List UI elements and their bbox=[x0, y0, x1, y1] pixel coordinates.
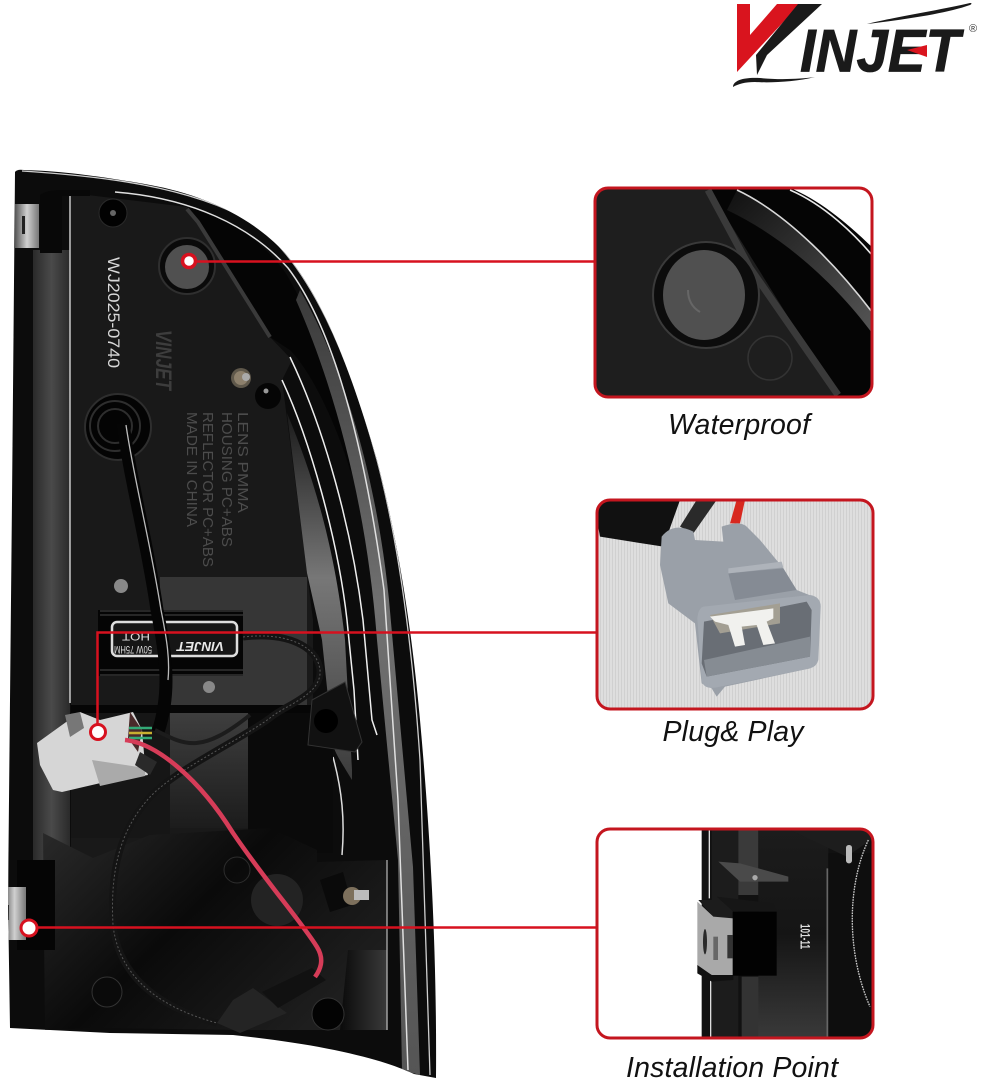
logo registered mark: ® bbox=[969, 23, 977, 35]
lower hinge metal clip bbox=[8, 887, 26, 940]
logo swoosh top bbox=[867, 3, 972, 24]
moulded logo: VINJET bbox=[151, 330, 176, 391]
large disc mark bbox=[251, 874, 303, 926]
small screw bbox=[203, 681, 215, 693]
top hinge metal clip bbox=[15, 204, 39, 248]
moulded material text: REFLECTOR PC+ABS bbox=[199, 412, 216, 567]
inner wedge bbox=[287, 413, 352, 780]
right lower box bbox=[340, 950, 387, 1030]
marker bbox=[182, 254, 196, 268]
ridge bbox=[187, 209, 270, 337]
white connector bbox=[37, 712, 157, 792]
screw bbox=[114, 579, 128, 593]
main black cable bbox=[123, 423, 166, 732]
left lower grommet bbox=[92, 977, 122, 1007]
braided loom bbox=[114, 634, 307, 986]
label brand: VINJET bbox=[176, 639, 224, 654]
red wire bbox=[125, 740, 321, 977]
left vertical strip bbox=[33, 250, 70, 870]
mounting tab bbox=[33, 860, 55, 950]
detail photo: mounting clip bbox=[597, 828, 875, 1040]
frame bbox=[597, 500, 873, 709]
detail photo: connector bbox=[593, 500, 873, 709]
panel: installation point bbox=[597, 828, 875, 1082]
logo: Vinjet bbox=[733, 3, 977, 87]
black bead bbox=[255, 383, 281, 409]
top grommet bbox=[99, 199, 127, 227]
lower grommets bbox=[312, 998, 344, 1030]
marker bbox=[90, 724, 106, 740]
panel: plug and play bbox=[593, 500, 873, 748]
callout line: waterproof bbox=[182, 254, 595, 268]
vertical white lines bbox=[8, 196, 71, 905]
logo mark: red V bbox=[737, 4, 800, 72]
small disc mark bbox=[224, 857, 250, 883]
lamp body bbox=[0, 160, 450, 1082]
label spec: 50W 75HM bbox=[114, 643, 152, 655]
frame bbox=[597, 829, 873, 1038]
lower housing block bbox=[43, 828, 388, 1030]
logo wordmark: INJET bbox=[800, 18, 964, 84]
moulded material text bbox=[187, 413, 248, 566]
callout line: plug and play bbox=[90, 632, 597, 740]
marker bbox=[21, 920, 37, 936]
outer grey band bbox=[296, 290, 420, 1075]
frame bbox=[595, 188, 872, 397]
logo swoosh bottom bbox=[733, 77, 815, 87]
upper bolt bbox=[231, 368, 251, 388]
part number: WJ2025-0740 bbox=[104, 257, 122, 368]
logo accent triangle bbox=[907, 45, 927, 57]
tail light product photo bbox=[0, 160, 450, 1082]
label model: HOT bbox=[122, 630, 150, 642]
heat sink module bbox=[98, 610, 243, 676]
callout line: installation point bbox=[21, 920, 597, 936]
bottom connector bbox=[217, 968, 326, 1033]
black channel beside ridge bbox=[187, 207, 362, 490]
module label bbox=[112, 622, 237, 656]
logo mark: black V stroke bbox=[756, 4, 822, 75]
dark ledge bbox=[71, 705, 311, 713]
moulded material text: HOUSING PC+ABS bbox=[218, 412, 235, 547]
cable grommet bbox=[85, 394, 151, 460]
panel: waterproof bbox=[595, 188, 880, 441]
top hinge black block bbox=[40, 190, 90, 253]
moulded material text: LENS PMMA bbox=[234, 412, 251, 513]
caption: Waterproof bbox=[668, 409, 813, 441]
grey field behind module bbox=[160, 577, 307, 715]
moulded material text: MADE IN CHINA bbox=[183, 412, 200, 527]
waterproof plug bbox=[159, 238, 215, 294]
caption: Plug& Play bbox=[662, 716, 805, 748]
upper plate bbox=[71, 193, 313, 860]
contour white lines bbox=[22, 171, 430, 1075]
detail photo: mounting clip: 101-11 bbox=[798, 924, 814, 949]
lower bolt bbox=[320, 872, 369, 912]
centre recess bbox=[170, 715, 248, 810]
rear mounting recess bbox=[308, 682, 362, 752]
detail photo: plug bbox=[595, 188, 880, 397]
